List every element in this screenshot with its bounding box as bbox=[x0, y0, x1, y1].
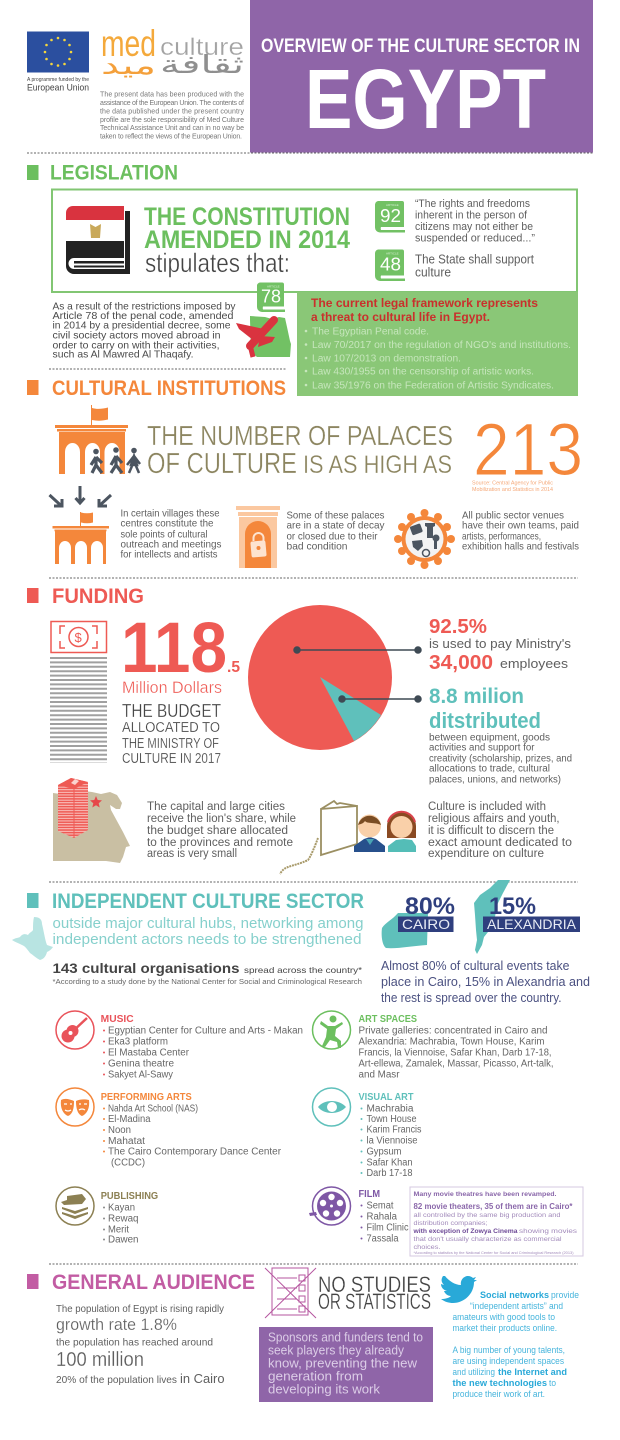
text: article 78 bbox=[52, 300, 236, 360]
text: religious affairs: Culture is included with bbox=[428, 801, 546, 813]
source note bbox=[472, 480, 554, 493]
stat: 8.8 million: 8.8 milion bbox=[429, 685, 524, 708]
list of laws: Law 35/1976 on the Federation of Artistic Syndicates. bbox=[312, 380, 554, 392]
headline: number of palaces: OF CULTURE bbox=[147, 448, 297, 480]
text: social networks bbox=[452, 1290, 579, 1399]
heading: funding: FUNDING bbox=[52, 585, 144, 608]
text: villages: sole points of cultural bbox=[120, 528, 208, 540]
icon: crossed checklist bbox=[265, 1268, 316, 1318]
stat: 8.8 million: activities and support for bbox=[429, 742, 535, 754]
list: visual art: la Viennoise bbox=[366, 1136, 418, 1146]
list: film: FILM bbox=[358, 1188, 380, 1200]
text: villages: outreach and meetings bbox=[120, 538, 222, 550]
list: performing arts: El-Madina bbox=[108, 1114, 151, 1125]
stat: 8.8 million bbox=[429, 685, 572, 786]
text: social networks: to bbox=[549, 1378, 556, 1388]
text: public sector venues: have their own teams, paid bbox=[462, 520, 579, 532]
stat: 92.5% bbox=[429, 616, 572, 674]
chart: budget pie bbox=[248, 605, 421, 750]
list: publishing: Dawen bbox=[108, 1234, 138, 1246]
list: music: Sakyet Al-Sawy bbox=[108, 1070, 173, 1080]
headline: no studies bbox=[318, 1272, 431, 1314]
text: capital share: receive the lion's share, while bbox=[147, 813, 296, 825]
text: cultural events: the rest is spread over the country. bbox=[381, 991, 562, 1005]
text: villages bbox=[120, 508, 222, 560]
headline: number of palaces bbox=[147, 420, 453, 480]
text: art spaces bbox=[358, 1014, 554, 1080]
text: public sector venues: artists, performances, bbox=[462, 530, 541, 542]
heading: general audience: GENERAL AUDIENCE bbox=[52, 1271, 255, 1294]
text: villages: for intellects and artists bbox=[120, 548, 218, 560]
icon: film reel bbox=[309, 1187, 350, 1225]
map: Cairo bbox=[382, 893, 455, 948]
article 48 text: The State shall support bbox=[415, 252, 534, 266]
text: decay: Some of these palaces bbox=[286, 510, 384, 522]
list: performing arts: Nahda Art School (NAS) bbox=[108, 1104, 198, 1114]
list: film: Semat bbox=[366, 1200, 394, 1212]
article 48 text bbox=[415, 252, 534, 280]
disclaimer text: Technical Assistance Unit and can in no way be bbox=[100, 125, 244, 132]
icon: dove bbox=[12, 917, 53, 960]
text: capital share: The capital and large cities bbox=[147, 801, 285, 813]
stat: 92.5%: employees bbox=[500, 656, 569, 671]
text: cultural events bbox=[381, 959, 590, 1005]
stat: 143 organisations bbox=[52, 960, 363, 986]
list: performing arts: Mahatat bbox=[108, 1136, 145, 1147]
callout: movie theatres: distribution companies; bbox=[414, 1220, 488, 1227]
text: article 78: Article 78 of the penal code, amended bbox=[52, 310, 234, 322]
EU funding caption: A programme funded by the bbox=[27, 77, 89, 83]
list: music: El Mastaba Center bbox=[108, 1048, 190, 1058]
text: population: The population of Egypt is rising rapidly bbox=[56, 1303, 225, 1315]
list: film bbox=[358, 1188, 408, 1244]
panel: sponsors: generation from bbox=[268, 1368, 363, 1384]
disclaimer text: taken to reflect the views of the European Union. bbox=[100, 134, 242, 140]
list: performing arts: (CCDC) bbox=[111, 1158, 145, 1168]
map: Cairo: CAIRO bbox=[402, 916, 450, 932]
text: social networks: provide bbox=[551, 1290, 579, 1300]
list: publishing: Kayan bbox=[108, 1202, 135, 1214]
icon: arts circle bbox=[394, 509, 455, 569]
heading: legislation: LEGISLATION bbox=[50, 162, 178, 184]
list: visual art: Gypsum bbox=[366, 1146, 402, 1158]
panel: sponsors: seek players they already bbox=[268, 1342, 404, 1358]
Med Culture logo: ميد bbox=[101, 51, 156, 80]
text: religious affairs bbox=[428, 801, 572, 860]
text: religious affairs: religious affairs and youth, bbox=[428, 813, 560, 825]
text: public sector venues bbox=[462, 510, 579, 552]
list: publishing bbox=[101, 1191, 158, 1246]
text: social networks: “independent artists” and bbox=[470, 1301, 563, 1311]
stat: 8.8 million: allocations to trade, cultural bbox=[429, 764, 550, 774]
disclaimer text: assistance of the European Union. The contents of bbox=[100, 100, 244, 107]
list: visual art: Darb 17-18 bbox=[366, 1168, 413, 1179]
icon: article 48 book: ARTICLE bbox=[386, 252, 399, 256]
stat: 143 organisations: 143 cultural organisations bbox=[52, 960, 240, 976]
callout: movie theatres bbox=[410, 1187, 583, 1256]
text: decay bbox=[286, 510, 385, 552]
text: decay: are in a state of decay bbox=[286, 520, 385, 532]
text: population: 20% of the population lives bbox=[56, 1374, 177, 1386]
map: Alexandria: ALEXANDRIA bbox=[487, 916, 577, 932]
stat: 143 organisations: *According to a study done by the National Center for Social and Criminological Research bbox=[52, 979, 362, 986]
text: social networks: and utilizing bbox=[452, 1367, 495, 1377]
text: population: the population has reached around bbox=[56, 1336, 213, 1348]
stat: 8.8 million: ditstributed bbox=[429, 708, 541, 733]
text: capital share: to the provinces and remote bbox=[147, 837, 293, 849]
map: Cairo: 80% bbox=[405, 893, 455, 920]
constitution heading: AMENDED IN 2014 bbox=[144, 226, 350, 254]
list: visual art: Karim Francis bbox=[366, 1124, 422, 1136]
icon: book, beads and children bbox=[280, 801, 416, 874]
stat: budget: ALLOCATED TO bbox=[122, 720, 220, 736]
subtitle: hubs: outside major cultural hubs, networking among bbox=[52, 915, 364, 932]
subtitle: hubs: independent actors needs to be strengthened bbox=[52, 931, 362, 948]
text: population bbox=[56, 1303, 225, 1386]
number: 213: 213 bbox=[473, 408, 583, 491]
text: public sector venues: All public sector venues bbox=[462, 510, 564, 522]
list: publishing: Merit bbox=[108, 1224, 129, 1236]
list: performing arts: Noon bbox=[108, 1125, 131, 1136]
map: Alexandria: 15% bbox=[489, 893, 536, 920]
panel: sponsors: developing its work bbox=[268, 1382, 381, 1396]
source note: Source: Central Agency for Public bbox=[472, 480, 554, 486]
callout: movie theatres: with exception of Zowya Cinema bbox=[413, 1228, 518, 1235]
list: music: Eka3 platform bbox=[108, 1036, 168, 1048]
list: publishing: Rewaq bbox=[108, 1214, 138, 1224]
article 48 text: culture bbox=[415, 266, 451, 280]
icon: map of Egypt with plane bbox=[236, 316, 291, 357]
panel: threat to cultural life: The current legal framework represents bbox=[311, 298, 538, 310]
Med Culture logo bbox=[101, 23, 244, 80]
list of laws: Law 70/2017 on the regulation of NGO's and institutions. bbox=[312, 340, 571, 351]
icon: article 92 book: 92 bbox=[380, 206, 401, 226]
constitution heading: THE CONSTITUTION bbox=[144, 203, 350, 231]
list of laws: Law 430/1955 on the censorship of artistic works. bbox=[312, 366, 534, 378]
text: capital share: areas is very small bbox=[147, 848, 237, 860]
text: social networks: amateurs with good tools to bbox=[452, 1312, 555, 1322]
icon: article 48 book: 48 bbox=[380, 254, 401, 274]
text: religious affairs: exact amount dedicated to bbox=[428, 837, 572, 849]
icon: eye bbox=[312, 1088, 350, 1126]
icon: publishing pages bbox=[56, 1187, 94, 1225]
stat: 8.8 million: between equipment, goods bbox=[429, 732, 550, 744]
callout: movie theatres: all controlled by the same big production and bbox=[414, 1212, 561, 1219]
stat: 92.5%: 92.5% bbox=[429, 616, 487, 638]
constitution heading bbox=[144, 203, 350, 278]
stat: budget: 118 bbox=[121, 609, 227, 688]
text: population: in Cairo bbox=[180, 1371, 224, 1386]
icon: Egypt map with money stack bbox=[53, 778, 130, 863]
panel: sponsors: Sponsors and funders tend to bbox=[268, 1330, 423, 1344]
callout: movie theatres: showing movies bbox=[519, 1228, 578, 1235]
icon: guitar bbox=[56, 1011, 94, 1049]
text: villages: In certain villages these bbox=[120, 508, 220, 520]
icon: EU flag bbox=[27, 32, 89, 72]
header logos bbox=[27, 23, 244, 140]
text: social networks: are using independent spaces bbox=[452, 1356, 564, 1366]
list: visual art: VISUAL ART bbox=[358, 1092, 414, 1103]
stat: 8.8 million: creativity (scholarship, prizes, and bbox=[429, 754, 572, 764]
panel: sponsors: know, preventing the new bbox=[268, 1356, 418, 1370]
panel: sponsors bbox=[259, 1327, 433, 1402]
text: article 78: As a result of the restrictions imposed by bbox=[52, 300, 236, 312]
Med Culture logo: culture bbox=[160, 34, 244, 61]
list: visual art: Town House bbox=[366, 1114, 417, 1125]
text: art spaces: and Masr bbox=[358, 1070, 400, 1080]
list: music bbox=[101, 1014, 303, 1080]
icon: arrows into small palace bbox=[50, 486, 111, 564]
text: religious affairs: it is difficult to discern the bbox=[428, 825, 554, 837]
text: decay: or closed due to their bbox=[286, 530, 378, 542]
stat: 8.8 million: palaces, unions, and networks) bbox=[429, 774, 561, 786]
stat: budget: THE BUDGET bbox=[122, 701, 221, 721]
stat: 92.5%: is used to pay Ministry's bbox=[429, 636, 572, 651]
callout: movie theatres: Many movie theatres have been revamped. bbox=[414, 1191, 557, 1198]
icon: banknote stack: $ bbox=[74, 630, 82, 645]
text: article 78: civil society actors moved abroad in bbox=[52, 330, 221, 342]
EU funding caption: European Union bbox=[27, 82, 89, 94]
list: visual art bbox=[358, 1092, 422, 1179]
text: article 78: such as Al Mawred Al Thaqafy. bbox=[52, 348, 194, 360]
callout: movie theatres: choices. bbox=[414, 1244, 441, 1251]
list: film: Rahala bbox=[366, 1212, 397, 1222]
icon: article 78 book bbox=[257, 282, 285, 312]
text: decay: bad condition bbox=[286, 540, 348, 552]
callout: movie theatres: 82 movie theaters, 35 of them are in Cairo* bbox=[414, 1201, 573, 1211]
map: Alexandria bbox=[474, 880, 580, 954]
stat: budget: THE MINISTRY OF bbox=[122, 736, 219, 752]
icon: article 48 book bbox=[375, 250, 405, 281]
icon: locked palace door bbox=[236, 506, 280, 568]
text: art spaces: Art-ellewa, Zamalek, Massar, Picasso, Art-talk, bbox=[358, 1058, 554, 1070]
text: public sector venues: exhibition halls and festivals bbox=[462, 540, 579, 552]
icon: dancing figure bbox=[312, 1011, 350, 1049]
icon: theatre masks bbox=[56, 1088, 94, 1126]
text: social networks: market their products online. bbox=[452, 1323, 557, 1333]
Med Culture logo: med bbox=[101, 23, 156, 64]
article 92 quote: suspended or reduced...” bbox=[415, 232, 535, 244]
text: art spaces: Alexandria: Machrabia, Town House, Karim bbox=[358, 1036, 544, 1048]
headline: no studies: OR STATISTICS bbox=[318, 1289, 431, 1314]
text: villages: centres constitute the bbox=[120, 518, 214, 530]
callout: movie theatres: that don't usually characterize as commercial bbox=[414, 1236, 562, 1243]
icon: article 78 book: 78 bbox=[261, 286, 281, 306]
article 92 quote bbox=[415, 198, 535, 244]
headline: number of palaces: THE NUMBER OF PALACES bbox=[147, 420, 453, 451]
text: capital share: the budget share allocated bbox=[147, 825, 288, 837]
list of laws: Law 107/2013 on demonstration. bbox=[312, 354, 461, 364]
source note: Mobilization and Statistics in 2014 bbox=[472, 487, 553, 493]
text: art spaces: Francis, la Viennoise, Safar Khan, Darb 17-18, bbox=[358, 1048, 552, 1058]
list: performing arts: The Cairo Contemporary Dance Center bbox=[108, 1146, 282, 1158]
subtitle: hubs bbox=[52, 915, 364, 948]
list: music: Egyptian Center for Culture and Arts - Makan bbox=[108, 1026, 303, 1036]
constitution heading: stipulates that: bbox=[145, 248, 290, 278]
list of laws bbox=[305, 326, 571, 392]
icon: article 92 book: ARTICLE bbox=[386, 203, 399, 207]
headline: no studies: NO STUDIES bbox=[318, 1272, 431, 1297]
disclaimer text: profile are the sole responsibility of Med Culture bbox=[100, 117, 244, 124]
disclaimer text: the data published under the present country bbox=[100, 108, 244, 116]
article 92 quote: inherent in the person of bbox=[415, 210, 528, 222]
heading: cultural institutions: CULTURAL INSTITUTIONS bbox=[52, 377, 286, 400]
list: publishing: PUBLISHING bbox=[101, 1191, 158, 1202]
stat: budget bbox=[121, 609, 240, 767]
icon: twitter bird bbox=[441, 1276, 477, 1303]
list: visual art: Machrabia bbox=[366, 1104, 414, 1114]
list of laws: The Egyptian Penal code. bbox=[312, 326, 429, 338]
icon: Egyptian flag book bbox=[66, 206, 130, 274]
disclaimer text: The present data has been produced with the bbox=[100, 92, 244, 98]
text: article 78: in 2014 by a presidential decree, some bbox=[52, 320, 231, 332]
panel: threat to cultural life: a threat to cultural life in Egypt. bbox=[311, 312, 490, 324]
text: religious affairs: expenditure on culture bbox=[428, 848, 544, 860]
icon: banknote stack bbox=[51, 622, 106, 763]
text: art spaces: Private galleries: concentrated in Cairo and bbox=[358, 1026, 548, 1036]
Med Culture logo: ثقافة bbox=[160, 50, 244, 79]
title panel: EGYPT bbox=[305, 52, 546, 146]
panel: constitution bbox=[52, 190, 577, 292]
stat: budget: Million Dollars bbox=[122, 678, 222, 697]
title panel bbox=[250, 0, 593, 152]
stat: 92.5%: 34,000 bbox=[429, 652, 493, 674]
list: performing arts: PERFORMING ARTS bbox=[101, 1092, 192, 1103]
text: population: 100 million bbox=[56, 1349, 144, 1371]
stat: 143 organisations: spread across the country* bbox=[244, 965, 363, 975]
list: film: 7assala bbox=[366, 1234, 399, 1244]
list: film: Film Clinic bbox=[366, 1222, 408, 1234]
list: music: MUSIC bbox=[101, 1014, 134, 1025]
text: cultural events: Almost 80% of cultural events take bbox=[381, 959, 570, 973]
text: population: growth rate 1.8% bbox=[56, 1315, 177, 1334]
callout: movie theatres: *According to statistics by the National Center for Social and Criminological Research (2013) bbox=[414, 1251, 574, 1255]
text: capital share bbox=[147, 801, 296, 860]
heading: independent culture sector: INDEPENDENT CULTURE SECTOR bbox=[52, 890, 364, 913]
text: social networks: produce their work of art. bbox=[452, 1389, 545, 1399]
article 92 quote: citizens may not either be bbox=[415, 221, 533, 233]
text: social networks: A big number of young talents, bbox=[452, 1345, 565, 1355]
list: music: Genina theatre bbox=[108, 1058, 174, 1070]
text: article 78: order to carry on with their activities, bbox=[52, 340, 220, 352]
icon: palace of culture with people bbox=[55, 405, 140, 474]
stat: budget: .5 bbox=[227, 659, 240, 676]
panel: threat to cultural life bbox=[297, 292, 578, 396]
text: art spaces: ART SPACES bbox=[358, 1014, 417, 1025]
list: visual art: Safar Khan bbox=[366, 1158, 412, 1168]
icon: article 92 book bbox=[375, 201, 405, 232]
stat: budget: CULTURE IN 2017 bbox=[122, 751, 221, 767]
text: social networks: the new technologies bbox=[452, 1378, 547, 1388]
text: social networks: Social networks bbox=[480, 1290, 549, 1300]
text: social networks: the Internet and bbox=[498, 1367, 567, 1377]
article 92 quote: “The rights and freedoms bbox=[415, 198, 530, 210]
icon: article 78 book: ARTICLE bbox=[267, 284, 280, 288]
text: cultural events: place in Cairo, 15% in Alexandria and bbox=[381, 975, 590, 989]
headline: number of palaces: IS AS HIGH AS bbox=[303, 451, 452, 479]
list: performing arts bbox=[101, 1092, 282, 1168]
disclaimer text bbox=[100, 92, 244, 140]
EU funding caption bbox=[27, 77, 89, 94]
